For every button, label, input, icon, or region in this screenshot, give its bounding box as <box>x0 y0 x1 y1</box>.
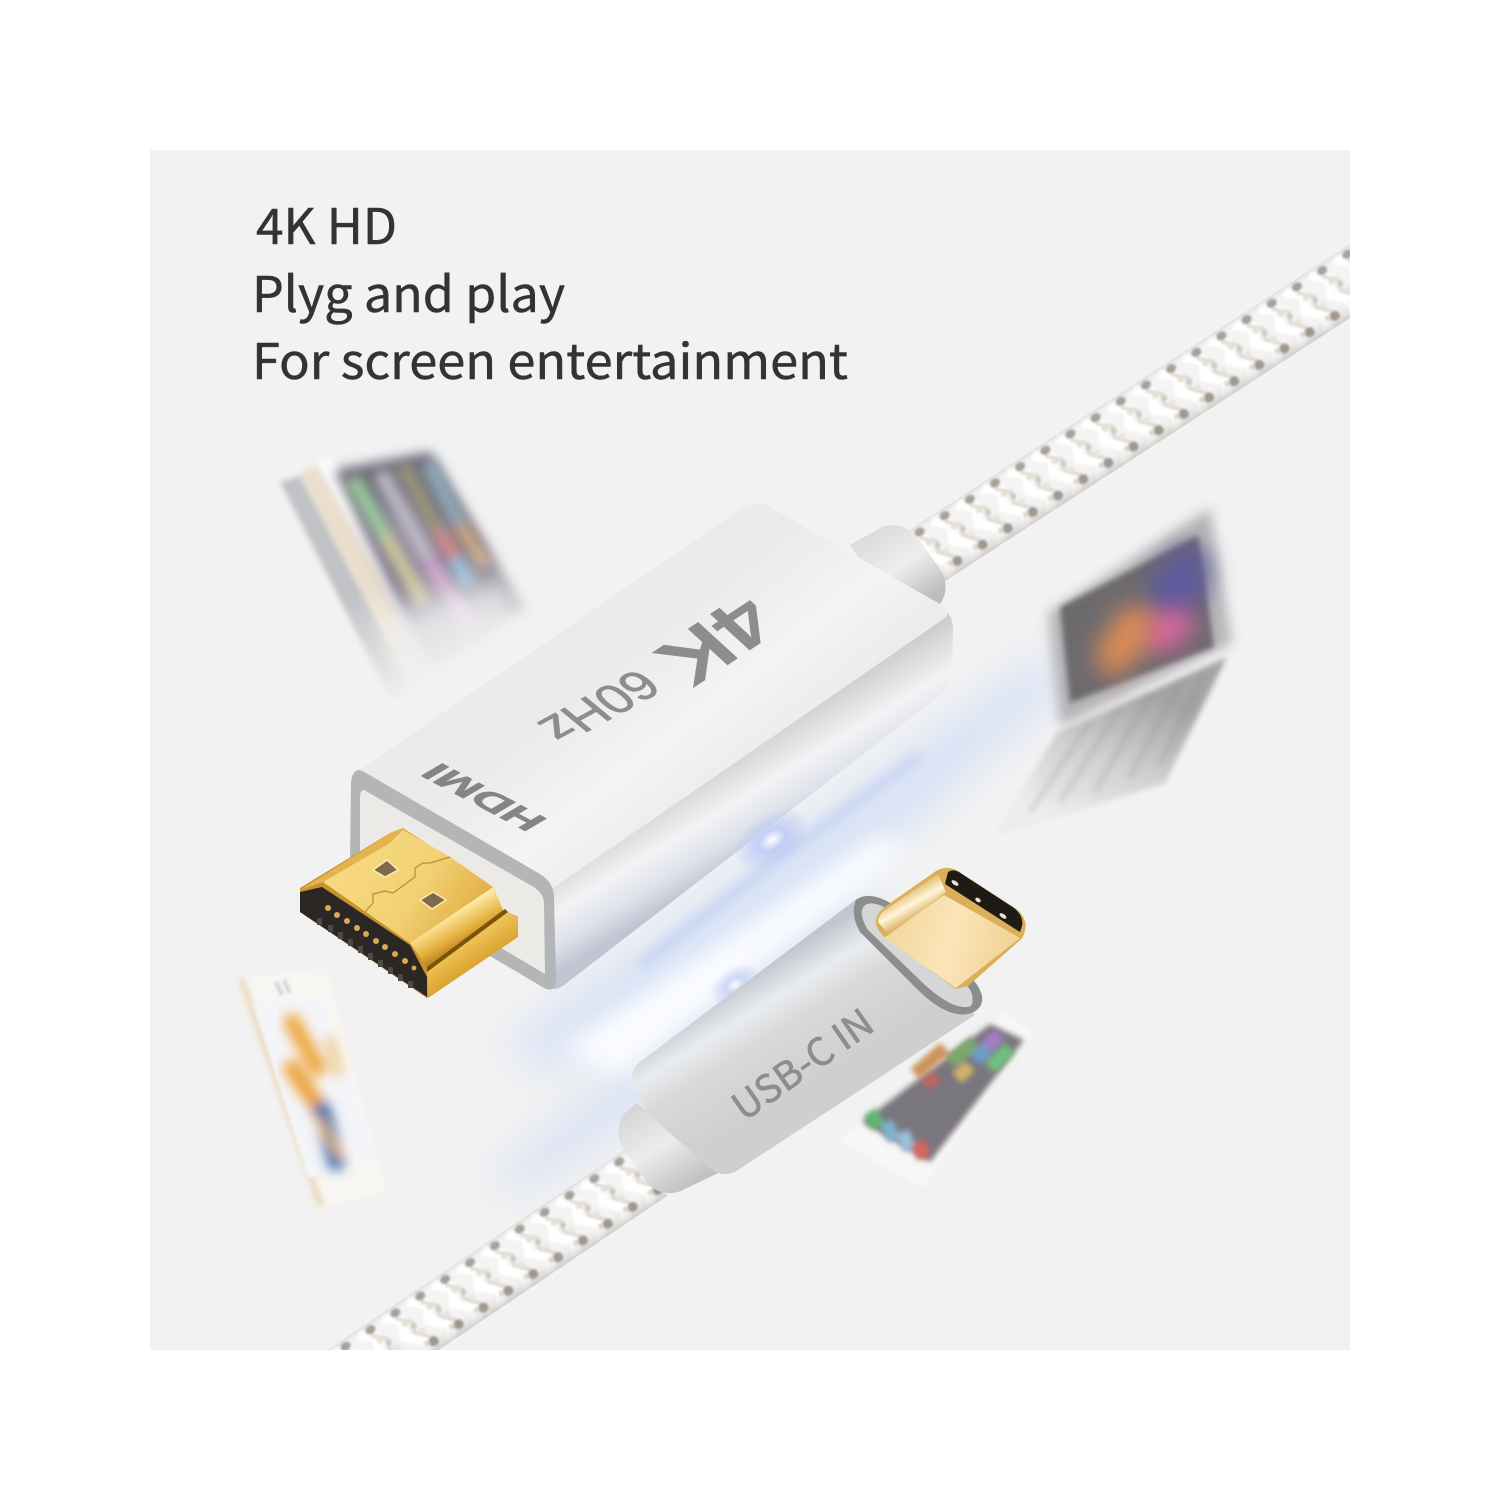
phone icon orange <box>915 1048 945 1074</box>
wallpaper yellow tip <box>318 1120 340 1155</box>
glow line under HDMI housing <box>640 755 920 965</box>
USB-C port contacts <box>951 879 1007 920</box>
cable shading <box>328 1150 668 1350</box>
phone wallpaper <box>292 1022 340 1162</box>
HDMI strain relief collar <box>850 525 946 620</box>
infographic canvas <box>150 150 1350 1350</box>
laptop keyboard streak <box>1030 672 1205 812</box>
heading text <box>252 188 848 394</box>
gold rounded side <box>878 874 946 936</box>
USB-C connector <box>618 868 1026 1193</box>
blurred tablet, upper left <box>279 444 526 685</box>
tablet screen lilac tone <box>358 507 445 614</box>
HDMI body logo: HDMI <box>413 758 556 836</box>
wallpaper orange petal <box>292 1022 318 1068</box>
laptop wallpaper orange <box>1087 595 1163 685</box>
app streak multi <box>402 464 438 530</box>
blue light glow between connectors <box>490 650 1060 1190</box>
HDMI gold plug <box>300 828 518 998</box>
app streak blue <box>455 558 470 586</box>
phone bezel <box>838 1012 1034 1188</box>
background panel <box>150 150 1350 1350</box>
blurred laptop, right <box>993 508 1232 837</box>
glow white streak <box>560 835 910 1075</box>
HDMI front face inner <box>360 790 545 974</box>
app streak pink <box>428 558 475 632</box>
phone icon dock blue <box>886 1122 894 1140</box>
laptop wallpaper pink <box>1131 601 1201 659</box>
app streak green <box>352 478 385 535</box>
phone icon green right <box>990 1048 1010 1068</box>
app streak yellow <box>385 535 425 605</box>
USB-C strain relief collar <box>618 1103 735 1193</box>
phone gold edge <box>238 978 324 1208</box>
tablet white bezel <box>316 460 401 612</box>
HDMI housing side face <box>548 610 953 989</box>
tablet grey edge <box>279 474 399 685</box>
heading line: Plyg and play: Plyg and play <box>252 256 565 327</box>
lower braided cable <box>328 1150 668 1350</box>
USB-C front inner <box>862 903 973 1007</box>
gold top plate <box>884 895 1020 988</box>
blue light glints <box>640 755 920 1015</box>
heading line: 4K HD: 4K HD <box>256 188 397 259</box>
phone icon purple <box>985 1034 1000 1048</box>
app streak orange <box>460 525 486 566</box>
plug top rear lip <box>300 828 493 890</box>
USB-C housing <box>632 898 975 1174</box>
plug square hole right <box>420 892 446 909</box>
blurred phone, behind USB-C <box>838 1012 1034 1188</box>
HDMI connector <box>300 504 953 998</box>
cable shading <box>910 244 1350 581</box>
heading line: For screen entertainment: For screen entertainment <box>252 323 848 394</box>
tablet screen <box>335 452 525 670</box>
phone screen <box>254 996 375 1178</box>
wallpaper lower petal <box>292 1068 322 1112</box>
USB-C port mouth <box>945 870 1022 932</box>
plug lower band <box>427 912 518 998</box>
upper braided cable <box>910 244 1350 581</box>
plug dark mouth <box>300 887 427 997</box>
glow band lower <box>502 920 829 1191</box>
phone icon red <box>928 1076 934 1086</box>
cable braid <box>334 1156 663 1350</box>
plug seam line <box>427 909 508 972</box>
tablet gold edge <box>300 464 402 652</box>
phone icon yellow <box>957 1066 970 1078</box>
plug seam <box>365 857 450 912</box>
tablet screen fade <box>387 572 519 665</box>
USB-C gold plug <box>876 868 1026 989</box>
HDMI body label 60Hz: 60Hz <box>526 661 673 753</box>
glint on HDMI housing edge <box>723 795 821 885</box>
blurred gold phone, lower left <box>238 968 386 1208</box>
app streak teal <box>428 462 460 525</box>
plug top plate <box>323 830 493 943</box>
wallpaper blue stem <box>322 1110 336 1162</box>
phone icon dock light <box>902 1132 910 1150</box>
laptop keyboard deck <box>993 657 1227 837</box>
HDMI front face outer rim <box>350 770 556 990</box>
cable braid <box>914 248 1350 576</box>
HDMI body label 4K: 4K <box>638 580 795 701</box>
HDMI housing top face <box>352 504 948 889</box>
USB-C front rim <box>854 896 982 1014</box>
phone body <box>238 968 386 1208</box>
USB-C body label: USB-C IN <box>719 993 883 1131</box>
wallpaper side petal <box>330 1040 338 1072</box>
plug outer shell <box>300 828 518 998</box>
gold shell <box>876 868 1026 989</box>
glint near USB-C <box>702 955 768 1015</box>
phone top speaker <box>276 980 290 995</box>
plug bevel <box>410 887 503 967</box>
plug contact row lower <box>317 918 413 988</box>
laptop screen halo <box>1048 508 1232 727</box>
laptop screen <box>1060 535 1214 703</box>
phone icon green <box>950 1042 975 1062</box>
phone icon dock red <box>918 1142 924 1158</box>
glow band upper <box>500 650 1060 1070</box>
app streak pale <box>380 472 428 558</box>
phone screen <box>862 1024 1024 1162</box>
laptop wallpaper purple <box>1134 536 1222 634</box>
plug square hole left <box>373 860 398 877</box>
phone icon blue <box>975 1048 988 1060</box>
plug contact row upper <box>325 905 416 970</box>
app streak red <box>438 530 455 558</box>
phone icon dock green <box>870 1112 878 1126</box>
